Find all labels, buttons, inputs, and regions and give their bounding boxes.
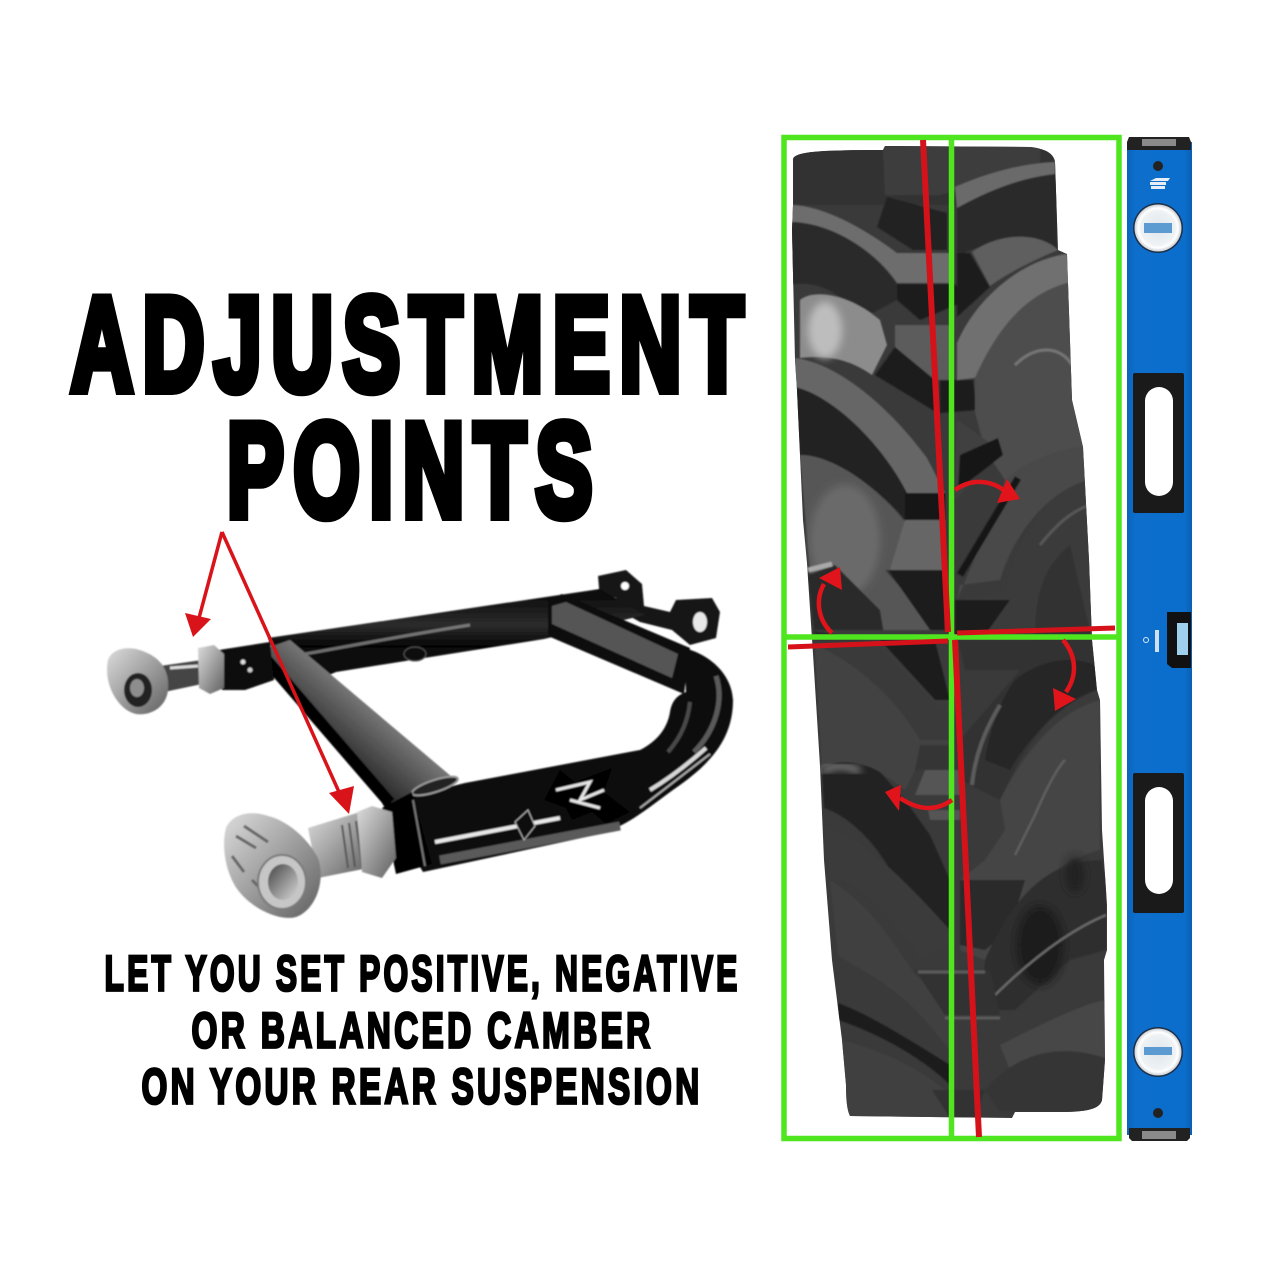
bent outer tube bbox=[382, 648, 733, 872]
diagonal cross tube bbox=[261, 640, 452, 803]
subheading text: OR BALANCED CAMBER bbox=[192, 1002, 654, 1058]
red arrows to adjustment points bbox=[185, 532, 354, 814]
green grid frame bbox=[784, 137, 1119, 1139]
subheading text: LET YOU SET POSITIVE, NEGATIVE bbox=[104, 946, 740, 1002]
heading: adjustment points: ADJUSTMENT bbox=[71, 271, 753, 419]
screw holes bbox=[1153, 161, 1163, 171]
top end cap bbox=[1127, 137, 1191, 150]
infographic canvas bbox=[68, 134, 1192, 1142]
bottom end cap bbox=[1129, 1128, 1190, 1141]
lower handle bbox=[1133, 773, 1184, 913]
tire bbox=[780, 140, 1120, 1130]
left rod end bbox=[107, 642, 274, 714]
lower collar bbox=[382, 792, 432, 874]
upper tube bbox=[268, 589, 645, 692]
subheading text: ON YOUR REAR SUSPENSION bbox=[142, 1058, 702, 1114]
mounting brackets bbox=[598, 570, 720, 645]
heading: adjustment points: POINTS bbox=[227, 397, 602, 545]
arrow: lower left bbox=[885, 785, 952, 811]
subheading text bbox=[104, 946, 740, 1114]
curved red arrows bbox=[819, 479, 1076, 811]
red camber lines bbox=[788, 140, 1115, 1137]
blue spirit level bbox=[1127, 137, 1192, 1141]
brand mark bbox=[1150, 178, 1170, 189]
top vial bbox=[1133, 203, 1183, 253]
arrow: upper right bbox=[955, 479, 1020, 503]
diagonal rear tube bbox=[548, 594, 690, 694]
suspension arm photo bbox=[107, 570, 733, 918]
arrow: upper left bbox=[819, 567, 842, 633]
heading: adjustment points bbox=[71, 271, 753, 545]
center vial block bbox=[1144, 612, 1191, 668]
arrow: lower right bbox=[1053, 640, 1076, 711]
upper-half tread bbox=[793, 146, 1056, 204]
star logo on tube bbox=[515, 768, 630, 840]
bottom vial bbox=[1133, 1027, 1183, 1077]
right rod end bbox=[224, 806, 396, 918]
upper handle bbox=[1133, 373, 1184, 513]
lower-half tread bbox=[816, 630, 884, 640]
